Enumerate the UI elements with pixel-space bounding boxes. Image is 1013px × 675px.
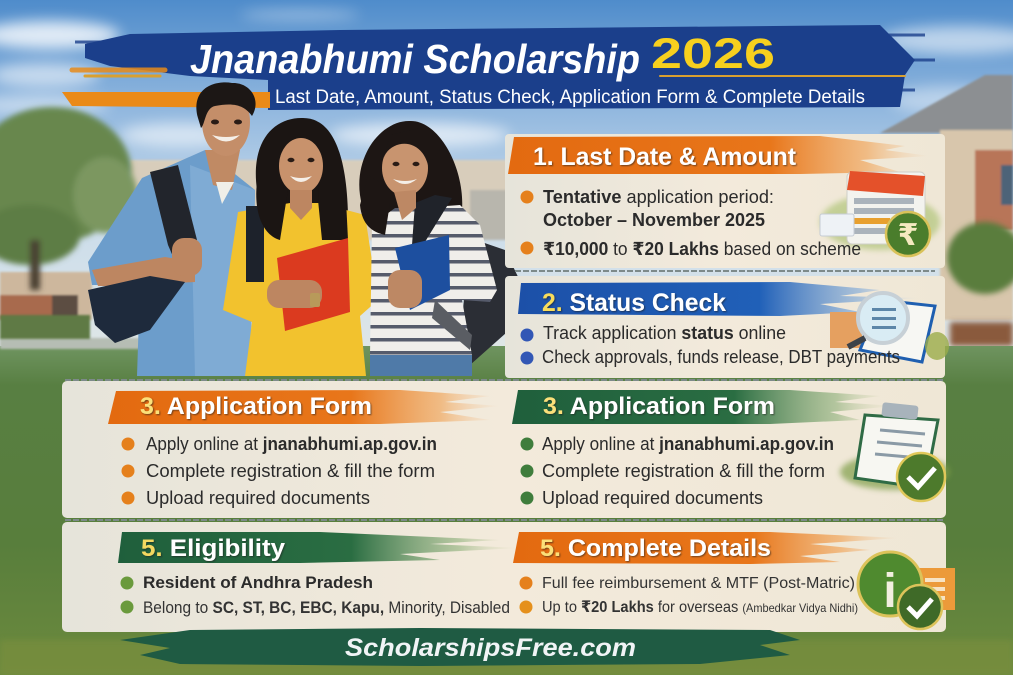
list: application steps right (520, 434, 834, 508)
student: woman in yellow kurta (223, 118, 378, 376)
bullet: track status: Track application status online (543, 323, 786, 343)
list: application steps left: Apply online at jnanabhumi.ap.gov.in (146, 434, 437, 454)
heading: application form right: 3. Application Form (543, 393, 775, 420)
banner: application form right (512, 390, 895, 424)
banner: section 2 (518, 282, 920, 316)
students photo group (88, 82, 522, 376)
banner: section 1 (508, 136, 930, 174)
heading: section 2: 2. Status Check (542, 289, 726, 317)
icon: magnifier over document (830, 293, 949, 362)
background: lawn (0, 315, 1013, 675)
panel: last date and amount (505, 134, 945, 271)
list: application steps right: Upload required documents (542, 488, 763, 508)
banner: blue brush stroke (62, 25, 935, 110)
panel: status check (505, 276, 949, 378)
bullet: approvals: Check approvals, funds release, DBT payments (542, 347, 900, 367)
icon: calendar and rupee (820, 171, 940, 256)
icon: clipboard with check (840, 402, 950, 501)
list: application steps right: Apply online at jnanabhumi.ap.gov.in (542, 434, 834, 454)
footer banner (120, 628, 800, 666)
icon: info badge with check: i (883, 565, 897, 618)
banner: application form left (108, 390, 500, 424)
background: right tree and hedge (947, 222, 1013, 346)
background: left tree (0, 107, 137, 290)
heading: complete details: 5. Complete Details (540, 535, 771, 562)
bullet: application period: Tentative application period: (543, 187, 774, 207)
bullet: application period: October – November 2025 (543, 210, 765, 230)
banner: complete details (513, 532, 900, 564)
list: application steps left: Complete registration & fill the form (146, 461, 435, 481)
background: clouds (0, 10, 1013, 147)
background: sky (0, 0, 1013, 350)
heading: year: 2026 (651, 30, 775, 78)
panel: application forms (62, 380, 950, 518)
list: application steps left (122, 434, 437, 508)
icon: calendar and rupee: ₹ (898, 219, 918, 252)
icon: info badge with check (858, 552, 955, 629)
background: right building (880, 75, 1013, 320)
background: central campus building (0, 160, 510, 320)
list: application steps left: Upload required documents (146, 488, 370, 508)
banner: eligibility (118, 532, 520, 563)
bullet: overseas: Up to ₹20 Lakhs for overseas (Ambedkar Vidya Nidhi) (542, 599, 858, 616)
student: woman in striped top (359, 121, 522, 376)
bullet: categories: Belong to SC, ST, BC, EBC, Kapu, Minority, Disabled (143, 598, 510, 617)
student: man with denim shirt (88, 82, 256, 376)
title banner (62, 25, 935, 110)
bullet: fee reimbursement: Full fee reimbursement & MTF (Post-Matric) (542, 575, 855, 592)
bullet: amount: ₹10,000 to ₹20 Lakhs based on scheme (543, 239, 861, 259)
subtitle: Last Date, Amount, Status Check, Application Form & Complete Details (275, 87, 865, 108)
heading: title: Jnanabhumi Scholarship (190, 36, 640, 82)
heading: section 1: 1. Last Date & Amount (533, 143, 797, 171)
heading: eligibility: 5. Eligibility (141, 535, 286, 562)
heading: application form left: 3. Application Form (140, 393, 372, 420)
panel: eligibility and complete details (62, 520, 955, 632)
footer website text: ScholarshipsFree.com (345, 634, 636, 662)
list: application steps right: Complete registration & fill the form (542, 461, 825, 481)
bullet: residence: Resident of Andhra Pradesh (143, 573, 373, 592)
bullet: application period (520, 187, 774, 230)
